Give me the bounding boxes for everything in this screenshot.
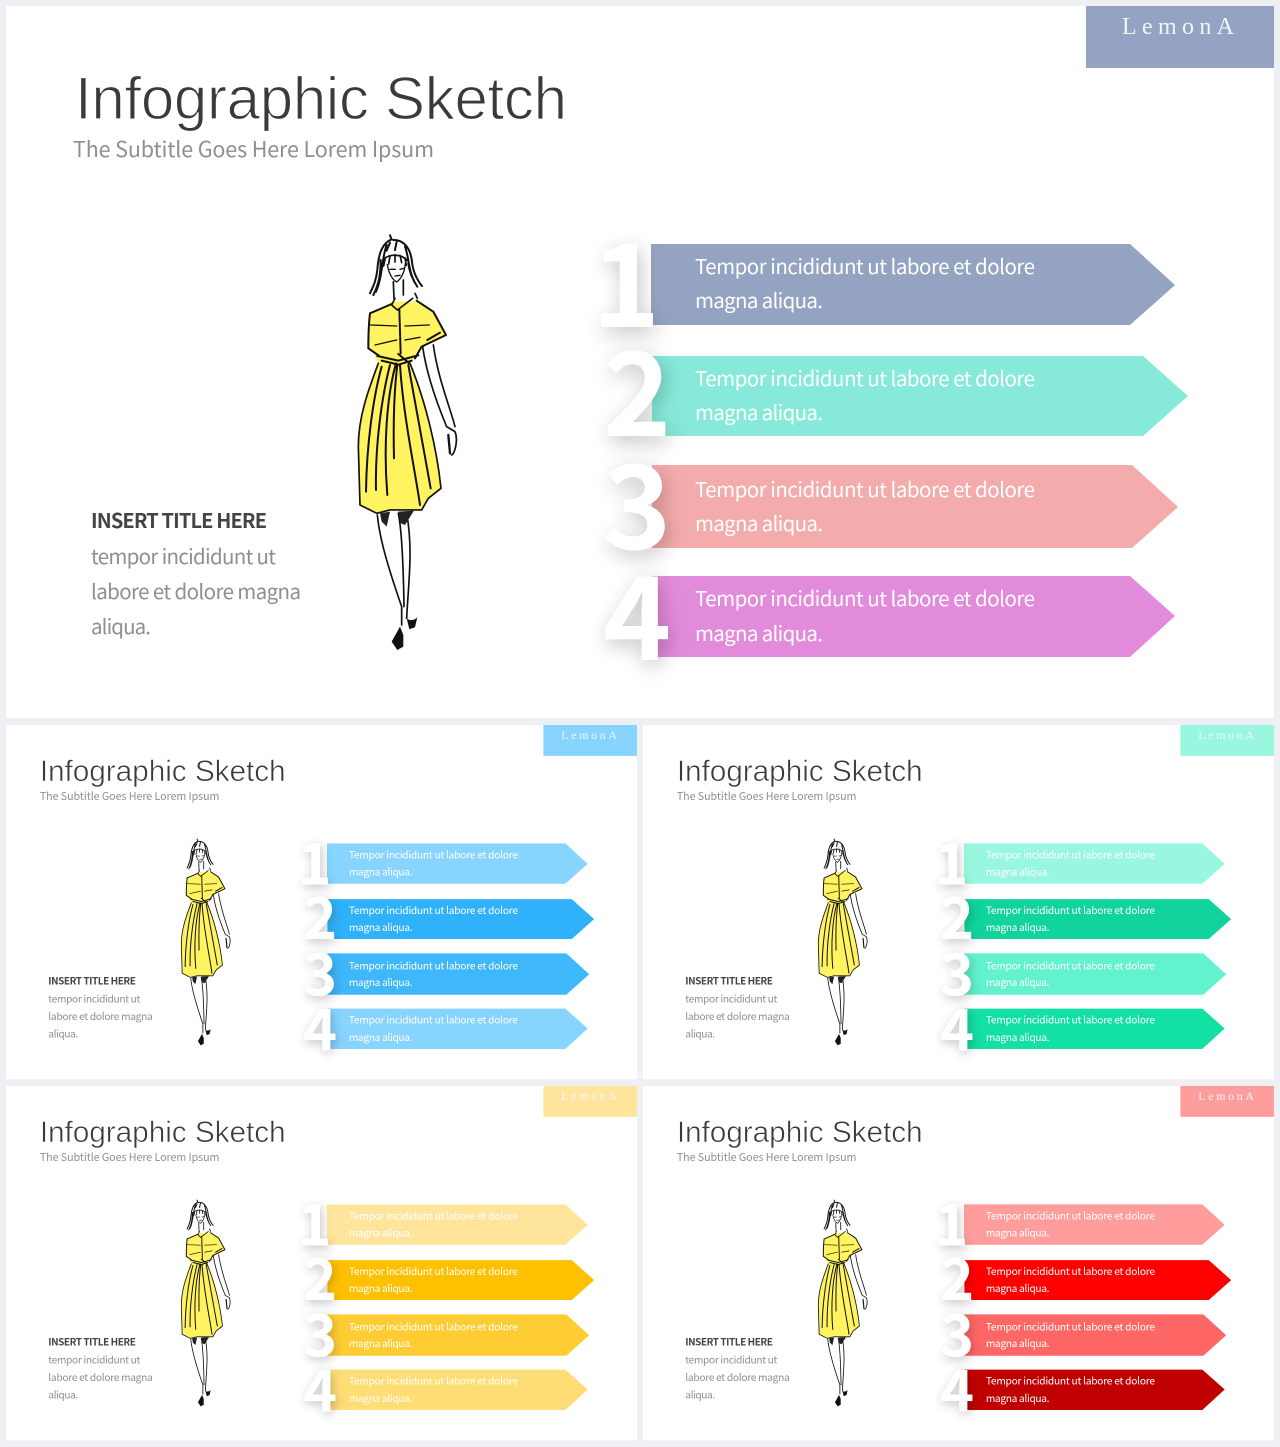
logo badge: LemonA (1198, 728, 1254, 742)
arrow 1 (297, 1179, 588, 1263)
arrow 2: 2 (303, 872, 337, 956)
text block: insert title: aliqua. (48, 1025, 78, 1040)
text block: insert title: INSERT TITLE HERE (685, 973, 773, 988)
text block: insert title: labore et dolore magna (48, 1008, 153, 1023)
text block: insert title (685, 1334, 790, 1401)
arrow 3: 3 (603, 415, 671, 583)
subtitle: The Subtitle Goes Here Lorem Ipsum (677, 1150, 856, 1165)
arrow 2: Tempor incididunt ut labore et dolore (349, 902, 518, 917)
arrow 4: Tempor incididunt ut labore et dolore (986, 1012, 1155, 1027)
arrow 4 (940, 983, 1225, 1067)
arrow 2: magna aliqua. (349, 919, 413, 934)
arrow 4 (303, 983, 588, 1067)
arrow 4: 4 (303, 1344, 337, 1428)
arrow 2 (940, 872, 1231, 956)
arrow 3: magna aliqua. (986, 974, 1050, 989)
arrow 3: Tempor incididunt ut labore et dolore (349, 957, 518, 972)
arrow 2: Tempor incididunt ut labore et dolore (986, 1263, 1155, 1278)
illustration: woman in yellow dress (358, 235, 456, 650)
text block: insert title: tempor incididunt ut (48, 1352, 141, 1367)
arrow 3: 3 (303, 928, 337, 1012)
subtitle: The Subtitle Goes Here Lorem Ipsum (40, 1150, 219, 1165)
logo badge (543, 725, 637, 756)
arrow 2: Tempor incididunt ut labore et dolore (349, 1263, 518, 1278)
logo badge: LemonA (1122, 14, 1235, 40)
panel: main slide (6, 6, 1274, 718)
arrow 1: 1 (297, 1179, 332, 1263)
logo badge (1086, 6, 1274, 68)
arrow 4: Tempor incididunt ut labore et dolore (986, 1373, 1155, 1388)
arrow 4: magna aliqua. (349, 1390, 413, 1405)
arrow 2 (940, 1233, 1231, 1317)
title: Infographic Sketch (677, 1116, 923, 1149)
arrow 2: 2 (603, 302, 671, 470)
arrow 1 (934, 1179, 1225, 1263)
arrow 4: magna aliqua. (986, 1390, 1050, 1405)
text block: insert title: labore et dolore magna (48, 1369, 153, 1384)
subtitle: The Subtitle Goes Here Lorem Ipsum (73, 133, 434, 164)
arrow 1: Tempor incididunt ut labore et dolore (986, 846, 1155, 861)
arrow 3: magna aliqua. (695, 507, 823, 537)
arrow 2: Tempor incididunt ut labore et dolore (986, 902, 1155, 917)
arrow 3: Tempor incididunt ut labore et dolore (349, 1318, 518, 1333)
arrow 3: 3 (940, 1289, 974, 1373)
arrow 4 (940, 1344, 1225, 1428)
arrow 2 (303, 872, 594, 956)
logo badge: LemonA (561, 728, 617, 742)
arrow 3: magna aliqua. (349, 974, 413, 989)
arrow 3 (603, 415, 1178, 583)
text block: insert title (48, 1334, 153, 1401)
arrow 2: magna aliqua. (986, 919, 1050, 934)
title: Infographic Sketch (75, 65, 567, 132)
text block: insert title: aliqua. (685, 1386, 715, 1401)
arrow 2: 2 (303, 1233, 337, 1317)
arrow 1: magna aliqua. (695, 284, 823, 314)
text block: insert title: aliqua. (91, 610, 151, 640)
arrow 1 (934, 818, 1225, 902)
arrow 2: magna aliqua. (695, 396, 823, 426)
logo badge (543, 1086, 637, 1117)
arrow 1: 1 (934, 818, 969, 902)
title: Infographic Sketch (40, 755, 286, 788)
arrow 1: magna aliqua. (349, 1224, 413, 1239)
arrow 1: magna aliqua. (986, 863, 1050, 878)
text block: insert title: INSERT TITLE HERE (685, 1334, 773, 1349)
text block: insert title: tempor incididunt ut (48, 991, 141, 1006)
illustration: woman in yellow dress (818, 1200, 867, 1406)
logo badge: LemonA (1198, 1089, 1254, 1103)
arrow 4: 4 (940, 983, 974, 1067)
arrow 2: magna aliqua. (986, 1280, 1050, 1295)
arrow 1 (592, 193, 1175, 361)
arrow 2: magna aliqua. (349, 1280, 413, 1295)
text block: insert title: INSERT TITLE HERE (91, 505, 267, 534)
arrow 3 (940, 1289, 1226, 1373)
arrow 1 (297, 818, 588, 902)
text block: insert title: INSERT TITLE HERE (48, 1334, 136, 1349)
text block: insert title: aliqua. (685, 1025, 715, 1040)
text block: insert title: labore et dolore magna (91, 575, 301, 605)
text block: insert title: tempor incididunt ut (685, 991, 778, 1006)
arrow 1: Tempor incididunt ut labore et dolore (349, 1207, 518, 1222)
text block: insert title (91, 505, 301, 640)
arrow 4: magna aliqua. (695, 617, 823, 647)
text block: insert title (685, 973, 790, 1040)
illustration: woman in yellow dress (818, 839, 867, 1045)
text block: insert title: INSERT TITLE HERE (48, 973, 136, 988)
panel: blue variant (6, 725, 637, 1079)
arrow 2: Tempor incididunt ut labore et dolore (695, 362, 1035, 392)
text block: insert title: tempor incididunt ut (91, 540, 276, 570)
arrow 2: 2 (940, 1233, 974, 1317)
subtitle: The Subtitle Goes Here Lorem Ipsum (677, 789, 856, 804)
arrow 4: 4 (603, 526, 671, 694)
arrow 3 (303, 1289, 589, 1373)
text block: insert title: labore et dolore magna (685, 1369, 790, 1384)
panel: yellow variant (6, 1086, 637, 1440)
logo badge: LemonA (561, 1089, 617, 1103)
arrow 3: magna aliqua. (986, 1335, 1050, 1350)
panel: green variant (643, 725, 1274, 1079)
arrow 1: Tempor incididunt ut labore et dolore (349, 846, 518, 861)
text block: insert title: aliqua. (48, 1386, 78, 1401)
arrow 2: 2 (940, 872, 974, 956)
logo badge (1180, 1086, 1274, 1117)
arrow 3: 3 (940, 928, 974, 1012)
arrow 3: Tempor incididunt ut labore et dolore (986, 1318, 1155, 1333)
arrow 1: 1 (297, 818, 332, 902)
arrow 4: Tempor incididunt ut labore et dolore (349, 1373, 518, 1388)
arrow 1: 1 (934, 1179, 969, 1263)
arrow 4: Tempor incididunt ut labore et dolore (349, 1012, 518, 1027)
arrow 4 (303, 1344, 588, 1428)
arrow 4 (603, 526, 1175, 694)
text block: insert title (48, 973, 153, 1040)
arrow 4: 4 (303, 983, 337, 1067)
panel: red variant (643, 1086, 1274, 1440)
text block: insert title: tempor incididunt ut (685, 1352, 778, 1367)
arrow 4: 4 (940, 1344, 974, 1428)
illustration: woman in yellow dress (181, 1200, 230, 1406)
title: Infographic Sketch (677, 755, 923, 788)
arrow 3: magna aliqua. (349, 1335, 413, 1350)
arrow 4: Tempor incididunt ut labore et dolore (695, 582, 1035, 612)
arrow 4: magna aliqua. (349, 1029, 413, 1044)
text block: insert title: labore et dolore magna (685, 1008, 790, 1023)
arrow 1: magna aliqua. (349, 863, 413, 878)
title: Infographic Sketch (40, 1116, 286, 1149)
arrow 1: Tempor incididunt ut labore et dolore (986, 1207, 1155, 1222)
arrow 1: Tempor incididunt ut labore et dolore (695, 250, 1035, 280)
arrow 3: Tempor incididunt ut labore et dolore (695, 473, 1035, 503)
arrow 3 (303, 928, 589, 1012)
arrow 1: 1 (592, 193, 660, 361)
arrow 2 (603, 302, 1188, 470)
arrow 3: Tempor incididunt ut labore et dolore (986, 957, 1155, 972)
subtitle: The Subtitle Goes Here Lorem Ipsum (40, 789, 219, 804)
logo badge (1180, 725, 1274, 756)
illustration: woman in yellow dress (181, 839, 230, 1045)
arrow 4: magna aliqua. (986, 1029, 1050, 1044)
arrow 3 (940, 928, 1226, 1012)
arrow 2 (303, 1233, 594, 1317)
arrow 3: 3 (303, 1289, 337, 1373)
arrow 1: magna aliqua. (986, 1224, 1050, 1239)
